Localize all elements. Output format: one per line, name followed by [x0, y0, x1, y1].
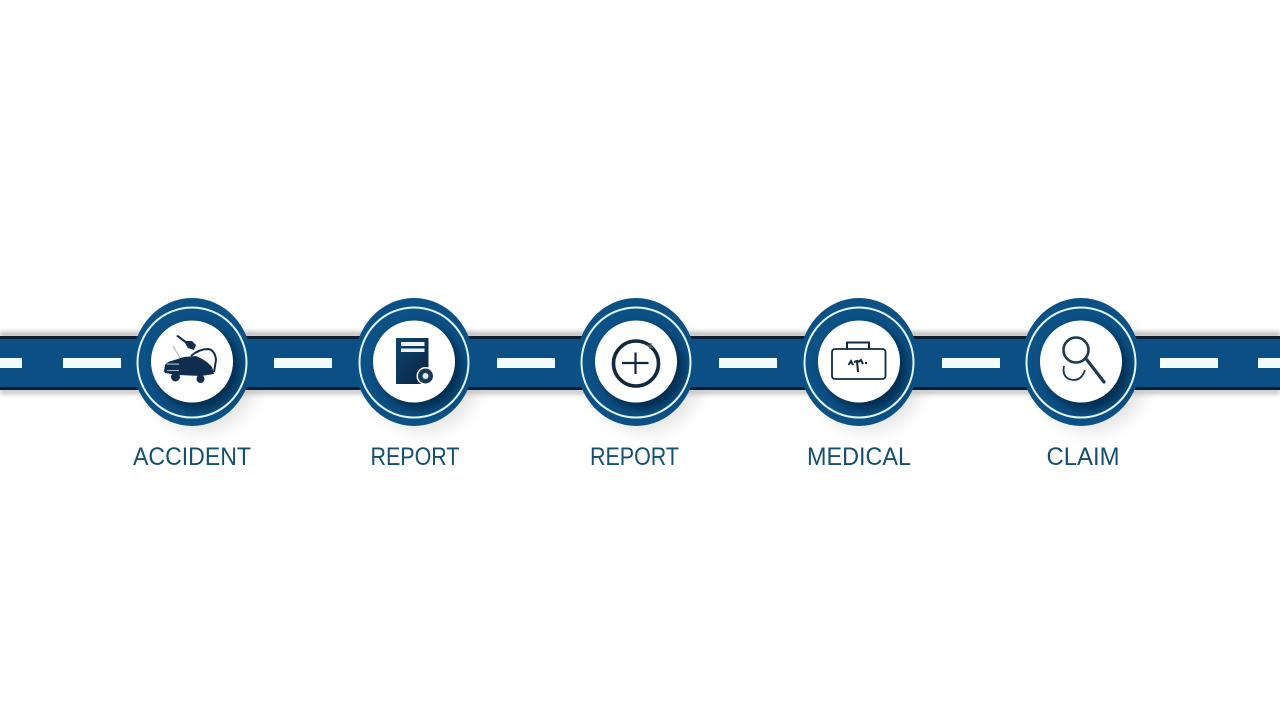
- step 3: report: [576, 298, 696, 426]
- icon: magnifier: [1064, 338, 1104, 382]
- step 4: medical: [800, 298, 918, 426]
- step 1: accident: [132, 298, 252, 426]
- icon: circled plus: [614, 341, 658, 386]
- step 5: claim: [1022, 298, 1140, 426]
- circle shadows: [146, 316, 1147, 432]
- step 2: report: [354, 298, 474, 426]
- icon: medical case: [832, 342, 886, 379]
- icon: crashed car: [164, 335, 216, 383]
- label: report: REPORT: [370, 443, 460, 471]
- road dashes: [0, 358, 1280, 368]
- label: claim: CLAIM: [1046, 443, 1120, 471]
- road: [0, 332, 1280, 394]
- icon: document with badge: [396, 338, 434, 385]
- label: medical: MEDICAL: [807, 443, 911, 471]
- label: accident: ACCIDENT: [133, 443, 251, 471]
- label: report: REPORT: [590, 443, 679, 471]
